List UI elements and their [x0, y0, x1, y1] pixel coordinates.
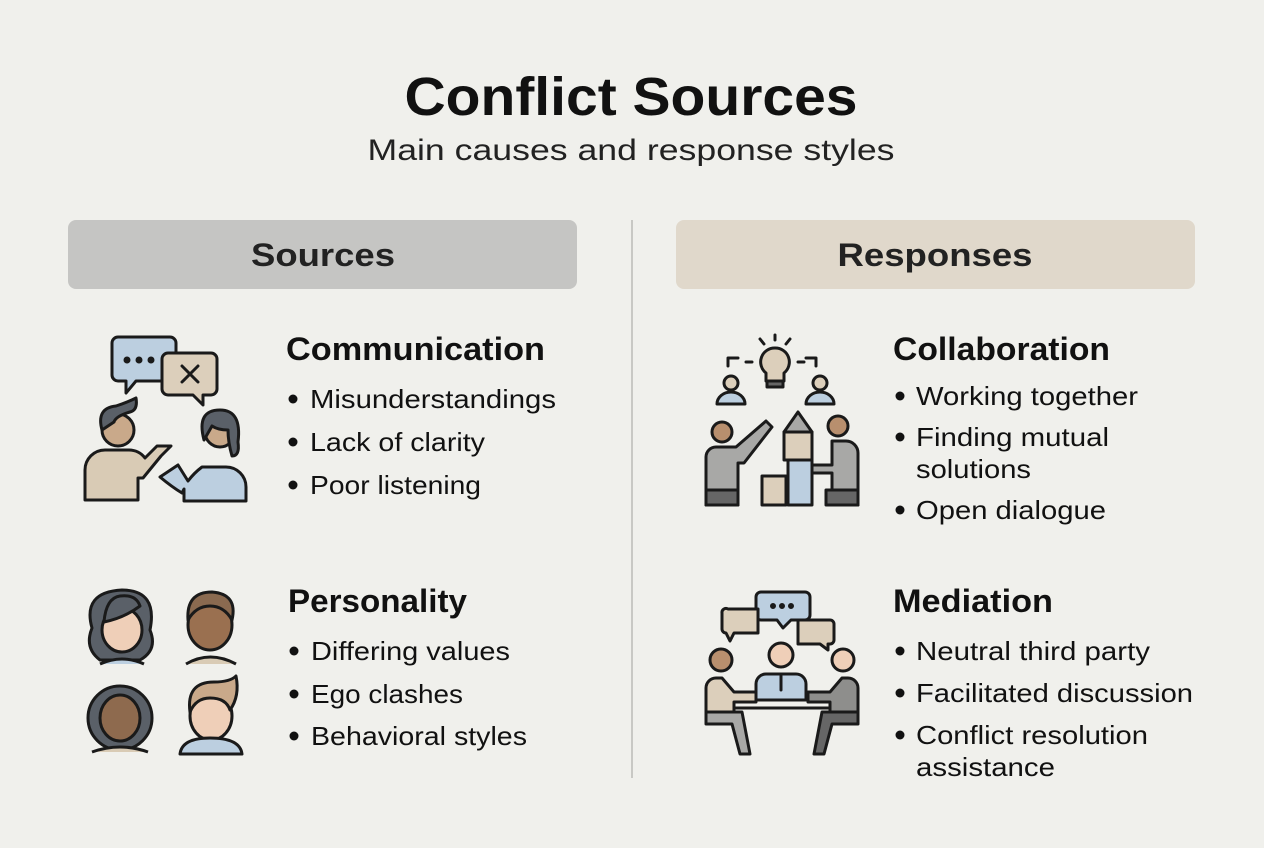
section: mediation: Facilitated discussion — [916, 678, 1193, 708]
section: mediation: assistance — [916, 752, 1055, 782]
icon: mediation — [706, 592, 858, 754]
section: personality — [288, 583, 527, 751]
icon: communication — [85, 337, 246, 501]
header: Responses — [676, 220, 1195, 289]
section: personality: Personality — [288, 583, 467, 619]
title: Conflict Sources — [404, 67, 858, 127]
icon: personality faces — [88, 590, 242, 754]
section: personality: Ego clashes — [311, 679, 463, 709]
header: Sources: Sources — [251, 237, 395, 273]
section: personality: Behavioral styles — [311, 721, 527, 751]
header: Sources — [68, 220, 577, 289]
section: mediation: Neutral third party — [916, 636, 1150, 666]
section: mediation: Mediation — [893, 583, 1053, 619]
subtitle: Main causes and response styles — [368, 134, 894, 167]
section: mediation: Conflict resolution — [916, 720, 1148, 750]
section: communication: Communication — [286, 331, 545, 367]
section: collaboration: solutions — [916, 454, 1031, 484]
section: communication — [286, 331, 556, 500]
header: Responses: Responses — [838, 237, 1032, 273]
section: collaboration: Working together — [916, 381, 1138, 411]
section: communication: Misunderstandings — [310, 384, 556, 414]
section: collaboration: Collaboration — [893, 331, 1110, 367]
section: communication: Lack of clarity — [310, 427, 485, 457]
icon: collaboration — [706, 335, 858, 505]
section: collaboration: Open dialogue — [916, 495, 1106, 525]
section: personality: Differing values — [311, 636, 510, 666]
section: collaboration: Finding mutual — [916, 422, 1109, 452]
section: collaboration — [893, 331, 1138, 525]
section: mediation — [893, 583, 1193, 782]
section: communication: Poor listening — [310, 470, 481, 500]
